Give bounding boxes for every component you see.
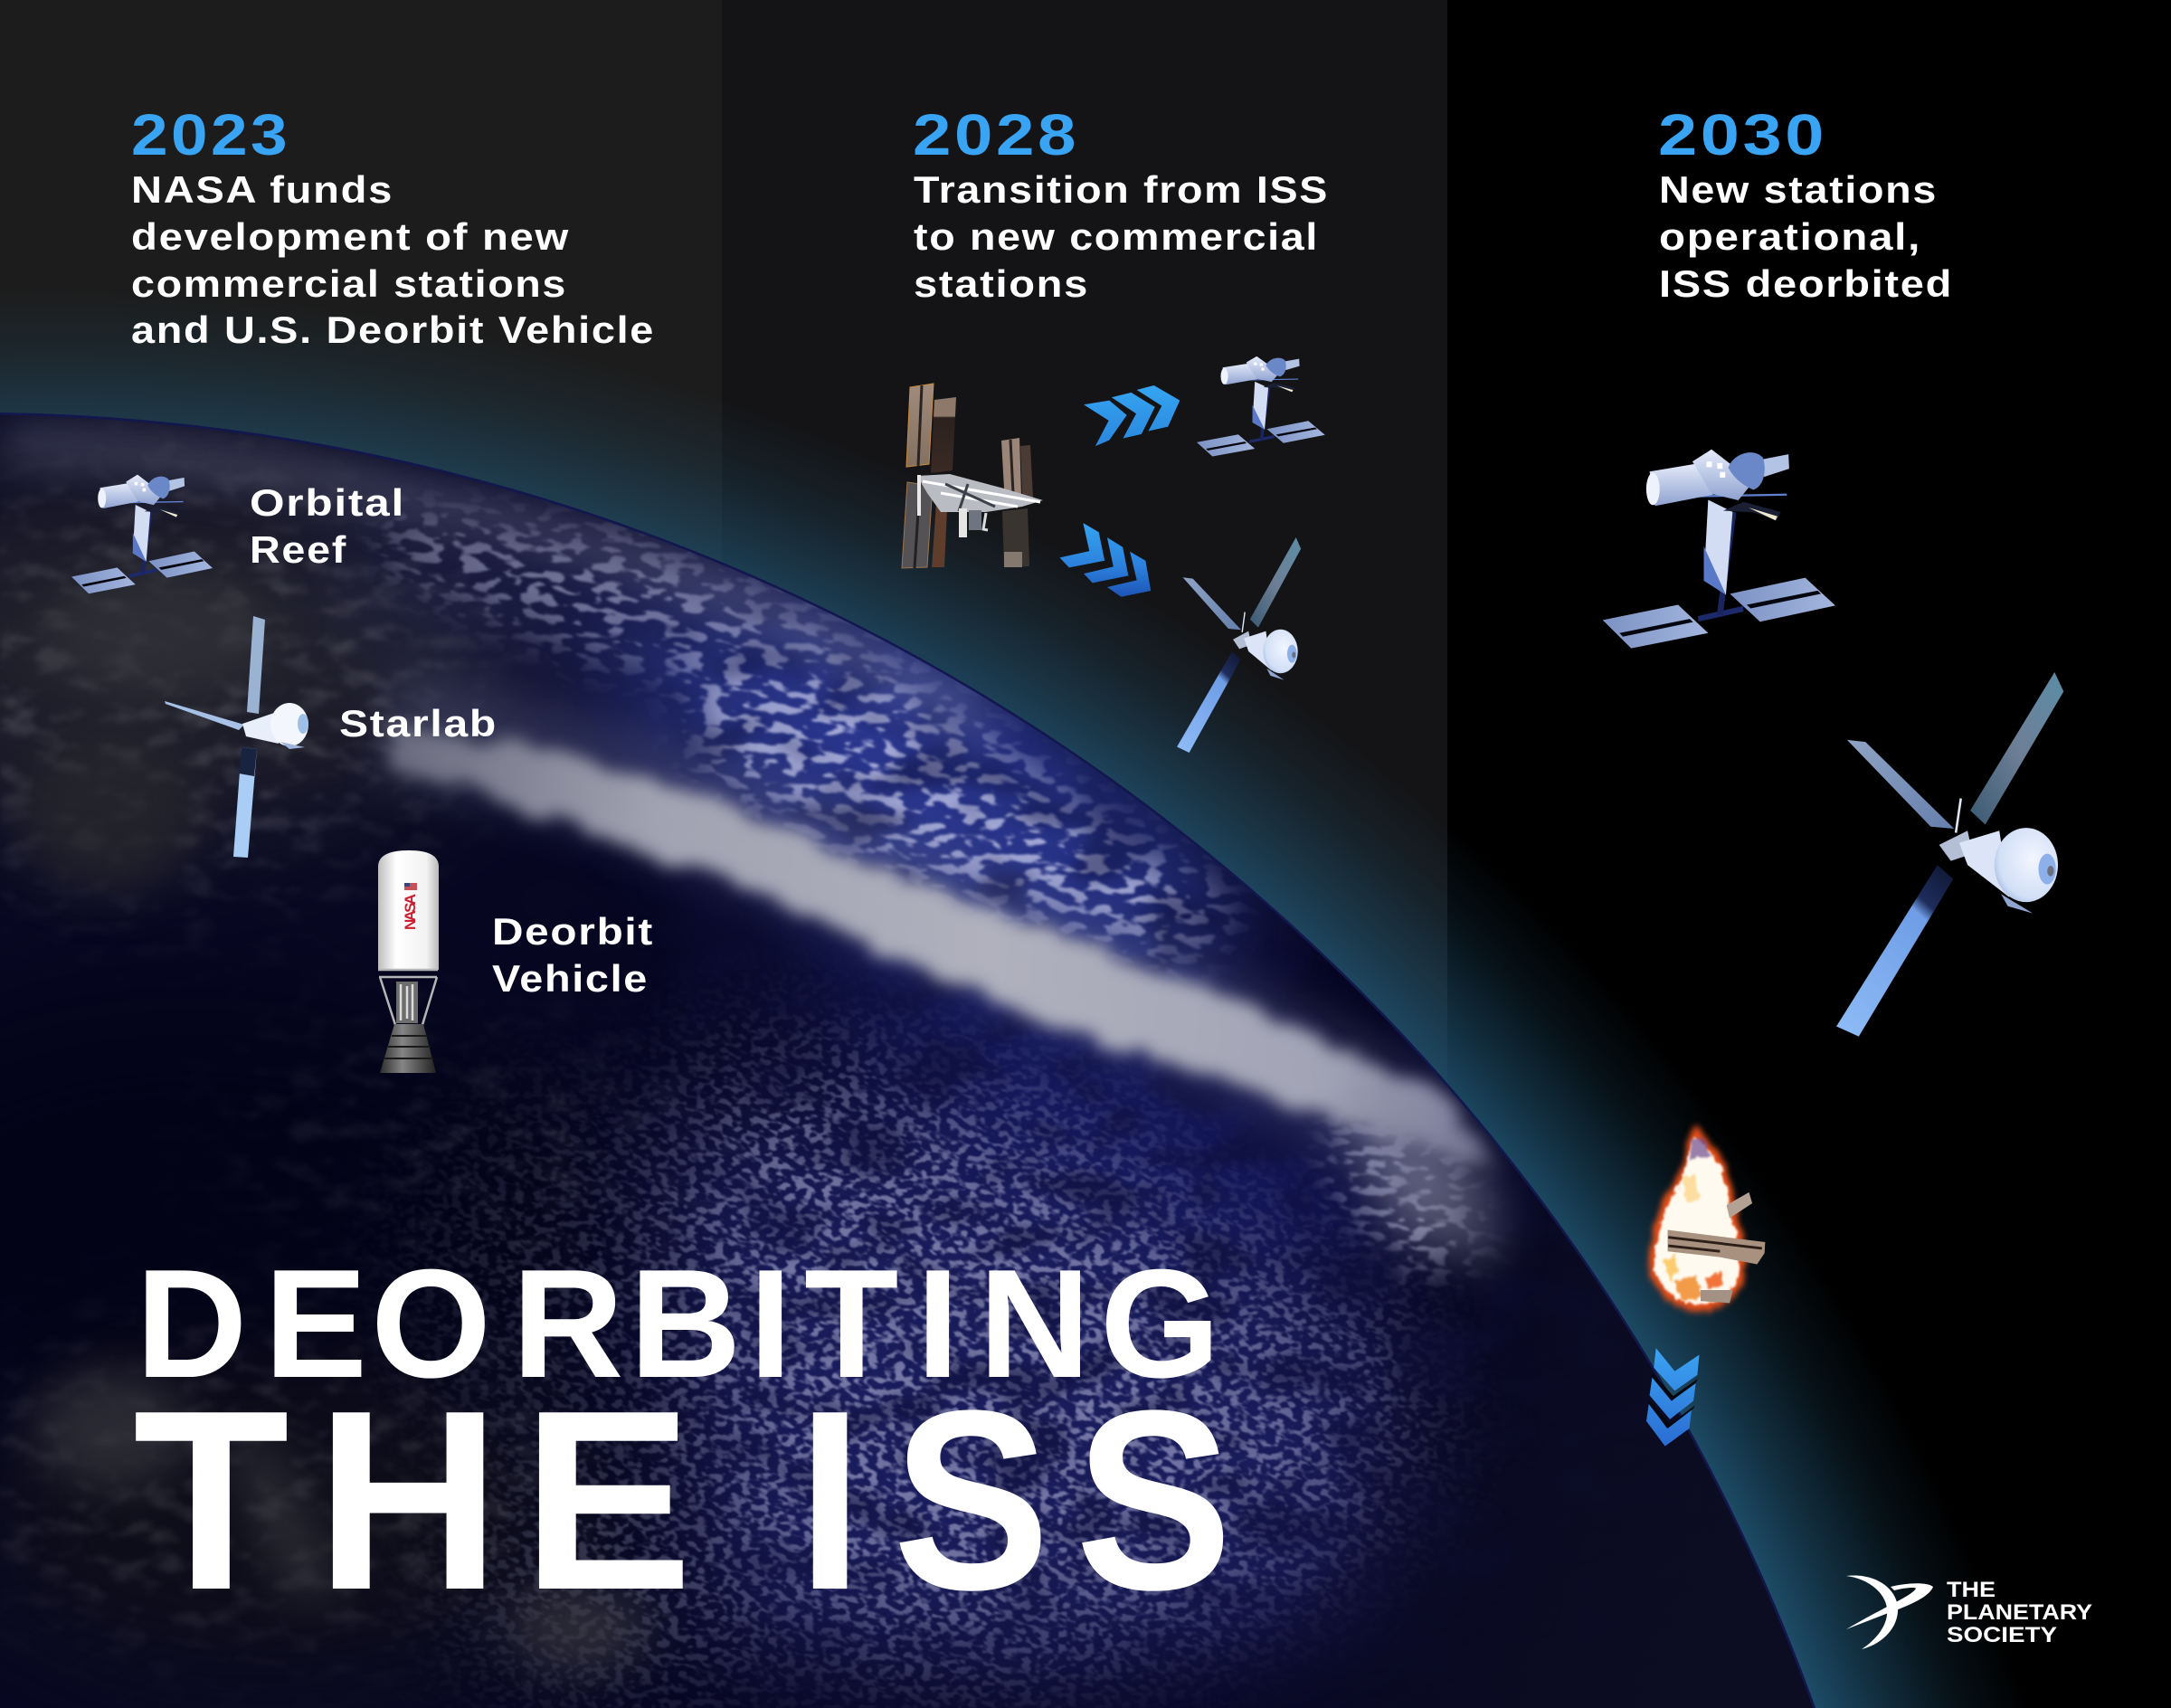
description 2028: stations (914, 262, 1089, 305)
description 2023: NASA funds (131, 168, 393, 211)
title line 2: ISS: ISS (797, 1357, 1232, 1643)
text block: 2028 (913, 102, 1329, 305)
description 2023: development of new (131, 215, 570, 258)
icon: Orbital Reef station (71, 475, 213, 593)
title line 2: THE: THE (133, 1357, 693, 1643)
panel: 2023 column background (0, 0, 722, 1708)
description 2028: Transition from ISS (914, 168, 1329, 211)
label: Starlab: Starlab (339, 702, 498, 745)
panel: 2030 column background (1447, 0, 2171, 1708)
arrow: descent chevrons (1646, 1348, 1700, 1447)
icon: Orbital Reef 2030 (1603, 450, 1835, 649)
dark gaps between cloud fields (0, 407, 1818, 1708)
label: Orbital Reef (250, 481, 405, 571)
limb cloud streak (0, 443, 986, 724)
description 2030 (1659, 168, 1953, 305)
main cloud band (380, 724, 1497, 1172)
year 2023: 2023 (131, 102, 290, 167)
year 2030: 2030 (1658, 102, 1827, 167)
description 2030: New stations (1659, 168, 1938, 211)
text block: 2023 (131, 102, 655, 351)
label: Deorbit Vehicle (492, 910, 654, 1000)
arrow: ISS to Orbital Reef (1084, 385, 1180, 446)
panel: 2028 column background (722, 0, 1447, 1708)
icon: Starlab 2028 (1177, 537, 1301, 753)
icon: Starlab station (165, 616, 308, 858)
year 2028: 2028 (913, 102, 1079, 167)
icon: Deorbit Vehicle: NASA (402, 894, 419, 930)
logo wordmark (1947, 1578, 2092, 1647)
title (133, 1238, 1232, 1643)
cloud speckle: muted grey land and cloud (0, 407, 1176, 1708)
Earth globe (0, 407, 1818, 1708)
label: Deorbit Vehicle: Deorbit (492, 910, 654, 953)
icon: International Space Station (902, 384, 1043, 568)
limb darkening (0, 407, 1818, 1708)
label: Orbital Reef: Reef (250, 528, 347, 571)
icon: Deorbit Vehicle (378, 850, 439, 1073)
label: Deorbit Vehicle: Vehicle (492, 957, 649, 1000)
grey cloud masses lower left (18, 570, 651, 1674)
description 2030: ISS deorbited (1659, 262, 1953, 305)
title line 1: DEORBITING (136, 1238, 1220, 1410)
description 2023: commercial stations (131, 262, 567, 305)
description 2030: operational, (1659, 215, 1921, 258)
logo wordmark: PLANETARY (1947, 1600, 2092, 1625)
description 2023: and U.S. Deorbit Vehicle (131, 308, 655, 351)
description 2028 (914, 168, 1329, 305)
description 2028: to new commercial (914, 215, 1319, 258)
cloud speckle: fine lower field (398, 1004, 1466, 1708)
cloud speckle: bright upper field (365, 494, 1496, 1294)
planet rim (0, 413, 1815, 1708)
icon: burning ISS (1649, 1125, 1765, 1313)
text block: 2030 (1658, 102, 1953, 305)
label: Orbital Reef: Orbital (250, 481, 405, 524)
logo mark (1846, 1575, 1933, 1649)
storm swirl at band end (1339, 1086, 1502, 1267)
icon: Orbital Reef 2028 (1197, 356, 1325, 457)
cloud band halo (389, 724, 1465, 1167)
logo wordmark: THE (1947, 1578, 1996, 1602)
logo wordmark: SOCIETY (1947, 1623, 2057, 1647)
arrow: ISS to Starlab (1059, 523, 1151, 597)
icon: Starlab 2030 (1836, 672, 2063, 1037)
description 2023 (131, 168, 655, 351)
logo: The Planetary Society (1846, 1575, 2092, 1649)
